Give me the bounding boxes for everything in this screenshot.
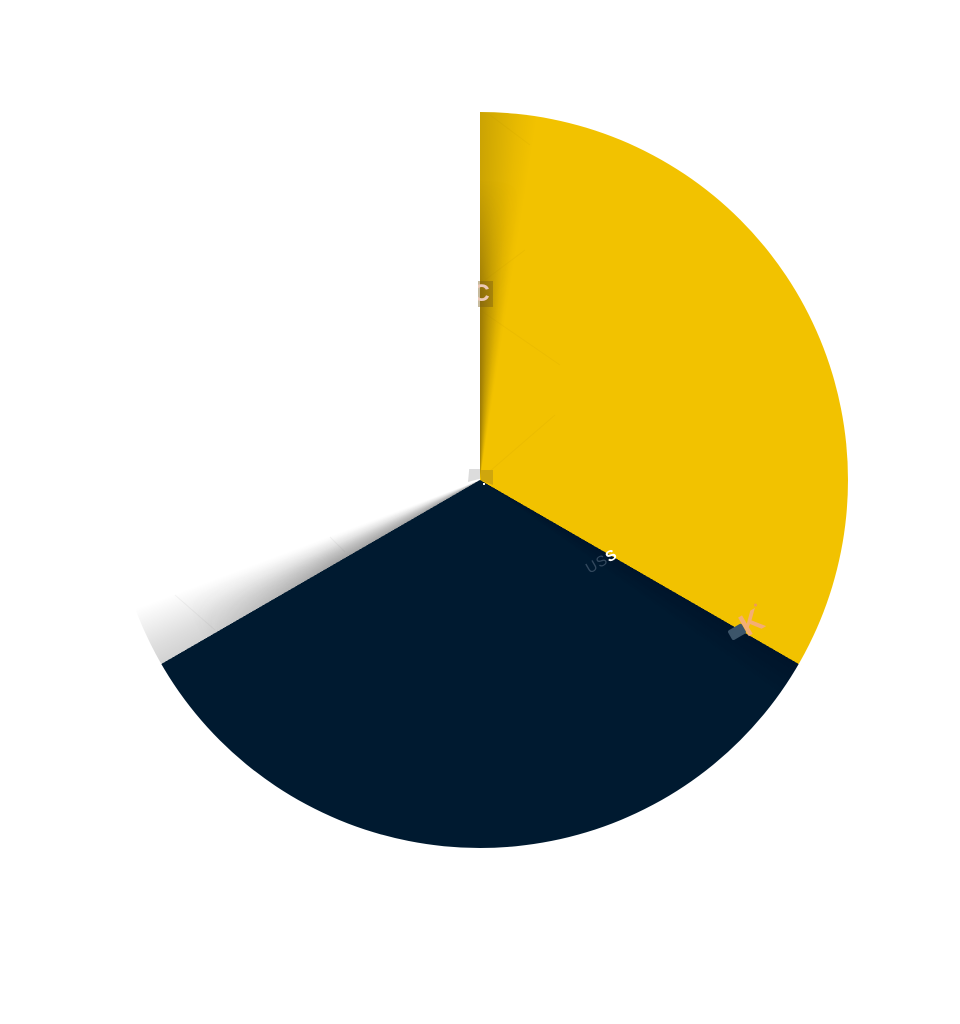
slice: white segment shadow [112,112,848,848]
letter K: K [733,602,770,643]
digit chip [727,623,747,641]
centre white dot [483,483,485,485]
slice: navy segment [112,112,848,848]
label fragment: US$: USS [583,546,621,577]
centre marker: dark yellow [481,470,493,485]
white segment shadow core [226,481,478,627]
centre marker: grey [468,469,480,482]
label fragment: C [478,281,493,307]
pie chart [140,112,848,848]
label fragment: 0K [728,602,770,643]
yellow slice inner shading [480,200,502,478]
degree dot [753,603,758,607]
slice: yellow segment [112,112,848,848]
